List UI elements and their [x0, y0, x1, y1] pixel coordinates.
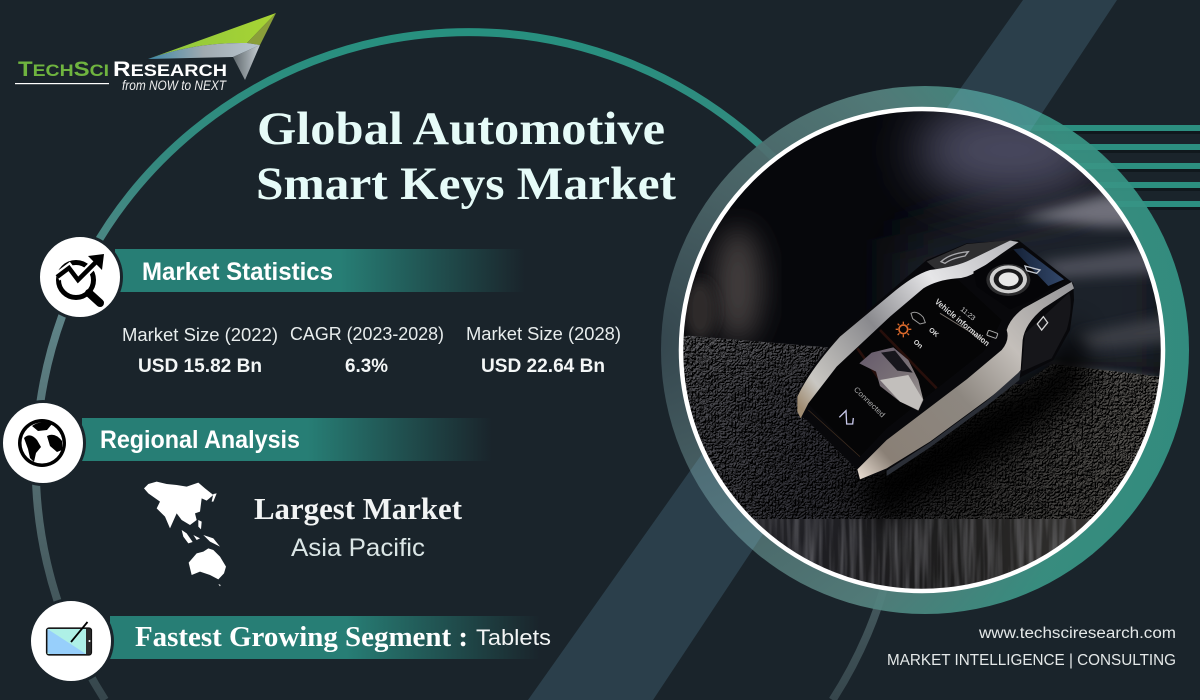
logo: RESEARCH: [113, 58, 227, 81]
stat: market size 2028: [466, 324, 621, 377]
map: Asia Pacific: [144, 482, 226, 586]
heading bar: regional analysis: [82, 418, 492, 461]
screen text: Connected: [852, 385, 887, 419]
stripes: right side teal lines: [1000, 125, 1200, 210]
diagonal light band: [528, 0, 1117, 700]
title: Smart Keys Market: [256, 158, 676, 210]
text: Asia Pacific: Asia Pacific: [291, 534, 425, 562]
stat: CAGR: 6.3%: [345, 356, 388, 377]
text: largest market: Largest Market: [254, 491, 463, 526]
stat: CAGR: CAGR (2023-2028): [290, 324, 444, 344]
panel: market statistics: [38, 236, 621, 377]
logo: from NOW to NEXT: [122, 77, 227, 93]
photo ring: [661, 86, 1189, 614]
key shadow: [855, 320, 1090, 525]
side button: [1022, 293, 1071, 372]
title: Global Automotive: [257, 103, 665, 155]
title: [256, 103, 676, 210]
website and tagline: MARKET INTELLIGENCE | CONSULTING: [887, 652, 1176, 669]
screen text: Vehicle information: [933, 297, 992, 348]
return arrow: [839, 411, 853, 424]
top lens: [973, 248, 1064, 296]
screen text: On: [912, 339, 924, 350]
left silver arm: [797, 241, 1019, 418]
logo: [15, 13, 276, 93]
heading bar: market statistics: [115, 249, 525, 292]
screen text: 11:23: [959, 306, 976, 323]
stat: market size 2028: USD 22.64 Bn: [481, 356, 605, 377]
icon: globe: [2, 402, 84, 484]
photo: smart key on leather: [680, 100, 1170, 600]
key fob: [797, 240, 1074, 479]
heading text: regional analysis: Regional Analysis: [100, 426, 300, 454]
leather surface: [680, 333, 1170, 600]
website and tagline: www.techsciresearch.com: [978, 625, 1176, 642]
on-screen car: [859, 347, 923, 411]
stat: CAGR: [290, 324, 444, 377]
screen text: [852, 297, 992, 419]
website and tagline: [887, 625, 1176, 669]
text: tablets: Tablets: [476, 625, 551, 650]
right silver arm: [857, 282, 1074, 479]
heading bar: fastest growing segment: [110, 616, 540, 659]
status icons: [899, 325, 908, 334]
stat: market size 2022: Market Size (2022): [122, 325, 278, 345]
key body: [797, 240, 1074, 479]
stat: market size 2022: USD 15.82 Bn: [138, 356, 262, 377]
logo arrow: [148, 13, 276, 80]
screen: [808, 279, 1002, 457]
photo white border: [681, 109, 1163, 591]
heading text: fastest growing segment: Fastest Growing Segment :: [135, 622, 468, 653]
stat: market size 2022: [122, 325, 278, 377]
large background arc: [36, 32, 902, 700]
screen text: OK: [927, 327, 940, 339]
top vent with car icon: [927, 240, 1013, 270]
right arm reflection: [887, 371, 1021, 476]
photo background blur: [684, 100, 1170, 390]
panel: fastest growing segment: [30, 600, 551, 682]
icon: chart magnifier: [38, 236, 122, 318]
stat: market size 2028: Market Size (2028): [466, 324, 621, 344]
panel: regional analysis: [2, 402, 492, 586]
icon: tablet: [30, 600, 112, 682]
heading text: market statistics: Market Statistics: [142, 258, 333, 286]
logo text: TECHSCI: [18, 58, 109, 81]
